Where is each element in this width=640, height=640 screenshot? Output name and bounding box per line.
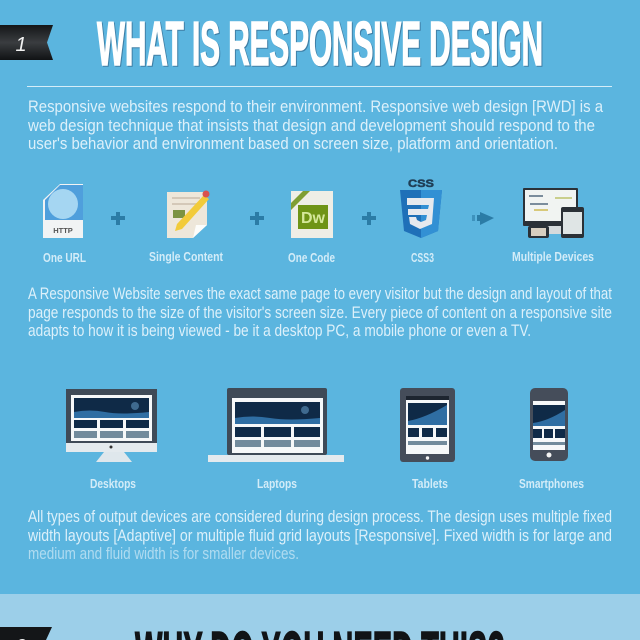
icon: dreamweaver file	[291, 191, 333, 238]
text block: intro: web design technique that insists that design and development should respond to the	[27, 117, 595, 135]
ribbon: section number 1	[0, 25, 53, 60]
icon: multiple devices	[523, 188, 584, 238]
icon: http page	[43, 184, 83, 238]
panel: why do you need this	[0, 594, 640, 640]
icon: css3 shield	[400, 178, 442, 238]
device: smartphone	[530, 388, 568, 461]
labels: equation: One URL	[43, 251, 86, 265]
ribbon: section number 2	[0, 627, 52, 640]
icon: plus	[250, 212, 264, 225]
device: laptop	[208, 388, 344, 462]
text block: output devices: medium and fluid width is for smaller devices.	[28, 545, 299, 563]
text block: how it serves: adapts to how it is being viewed - be it a desktop PC, a mobile phone or even a TV.	[28, 322, 531, 340]
labels: devices	[90, 477, 584, 491]
text block: how it serves	[28, 285, 612, 340]
labels: equation	[43, 250, 594, 265]
text block: intro: user's behavior and environment based on screen size, platform and orientation.	[28, 135, 558, 153]
icon: document with pencil	[167, 190, 210, 238]
icon: plus	[362, 212, 376, 225]
device: tablet	[400, 388, 455, 462]
labels: devices: Tablets	[412, 477, 448, 491]
ribbon: section number 1: 1	[15, 34, 27, 56]
arrow: results in	[472, 212, 494, 225]
labels: equation: Single Content	[149, 250, 224, 264]
device: desktop	[66, 389, 157, 462]
labels: devices: Desktops	[90, 477, 136, 491]
icon: plus	[111, 212, 125, 225]
text block: intro	[27, 98, 604, 153]
labels: equation: CSS3	[411, 251, 434, 265]
icon: dreamweaver file: Dw	[301, 210, 326, 227]
icon: http page: HTTP	[53, 226, 73, 235]
icon: css3 shield: CSS	[408, 178, 434, 190]
labels: equation: Multiple Devices	[512, 250, 594, 264]
labels: equation: One Code	[288, 251, 335, 265]
text block: output devices	[27, 508, 612, 563]
labels: devices: Smartphones	[519, 477, 584, 491]
labels: devices: Laptops	[257, 477, 297, 491]
